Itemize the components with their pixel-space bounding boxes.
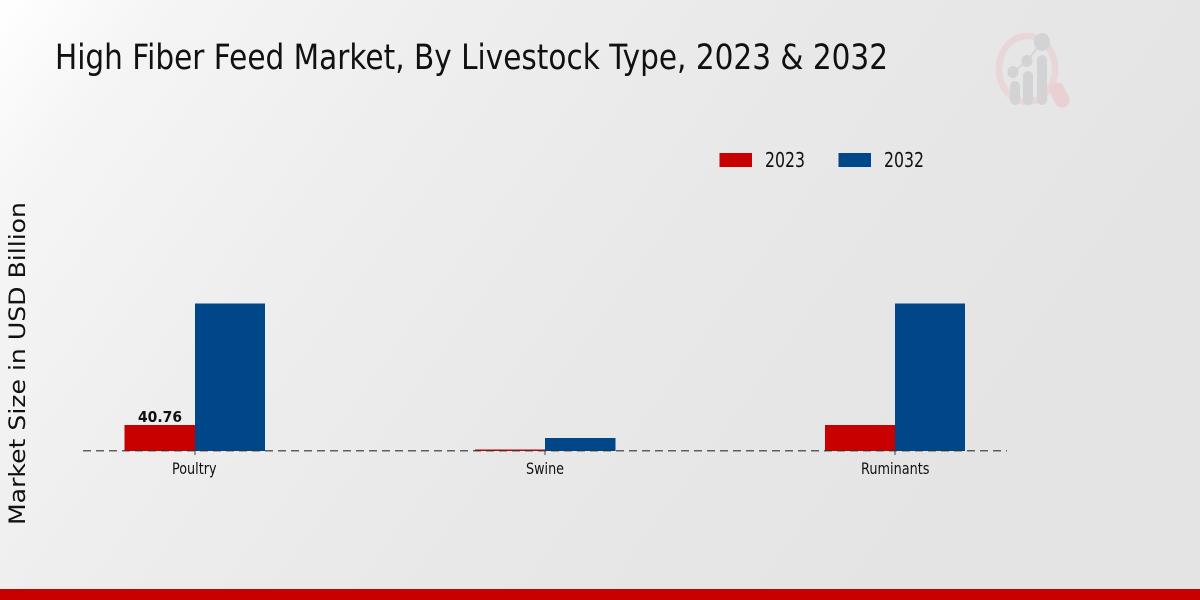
- legend item: 2023: 2023: [765, 148, 805, 172]
- footer bar: [0, 589, 1200, 600]
- legend item: 2032: [838, 148, 924, 172]
- icon: watermark logo: [999, 33, 1062, 105]
- legend item: 2023: [720, 148, 805, 172]
- group: Swine: [475, 438, 616, 451]
- legend item: 2032: 2032: [884, 148, 924, 172]
- x axis labels: [172, 459, 930, 478]
- x axis labels: Swine: [526, 459, 564, 478]
- group: Poultry: [124, 304, 265, 451]
- bar chart: [83, 304, 1007, 478]
- group: Ruminants: [825, 304, 965, 451]
- title: High Fiber Feed Market, By Livestock Type, 2023 & 2032: [55, 38, 888, 78]
- value label: 40.76: [138, 408, 182, 426]
- x axis baseline: [83, 450, 1007, 452]
- x axis labels: Poultry: [172, 459, 216, 478]
- legend: [720, 148, 924, 172]
- x axis labels: Ruminants: [861, 459, 930, 478]
- y axis label: Market Size in USD Billion: [5, 202, 31, 525]
